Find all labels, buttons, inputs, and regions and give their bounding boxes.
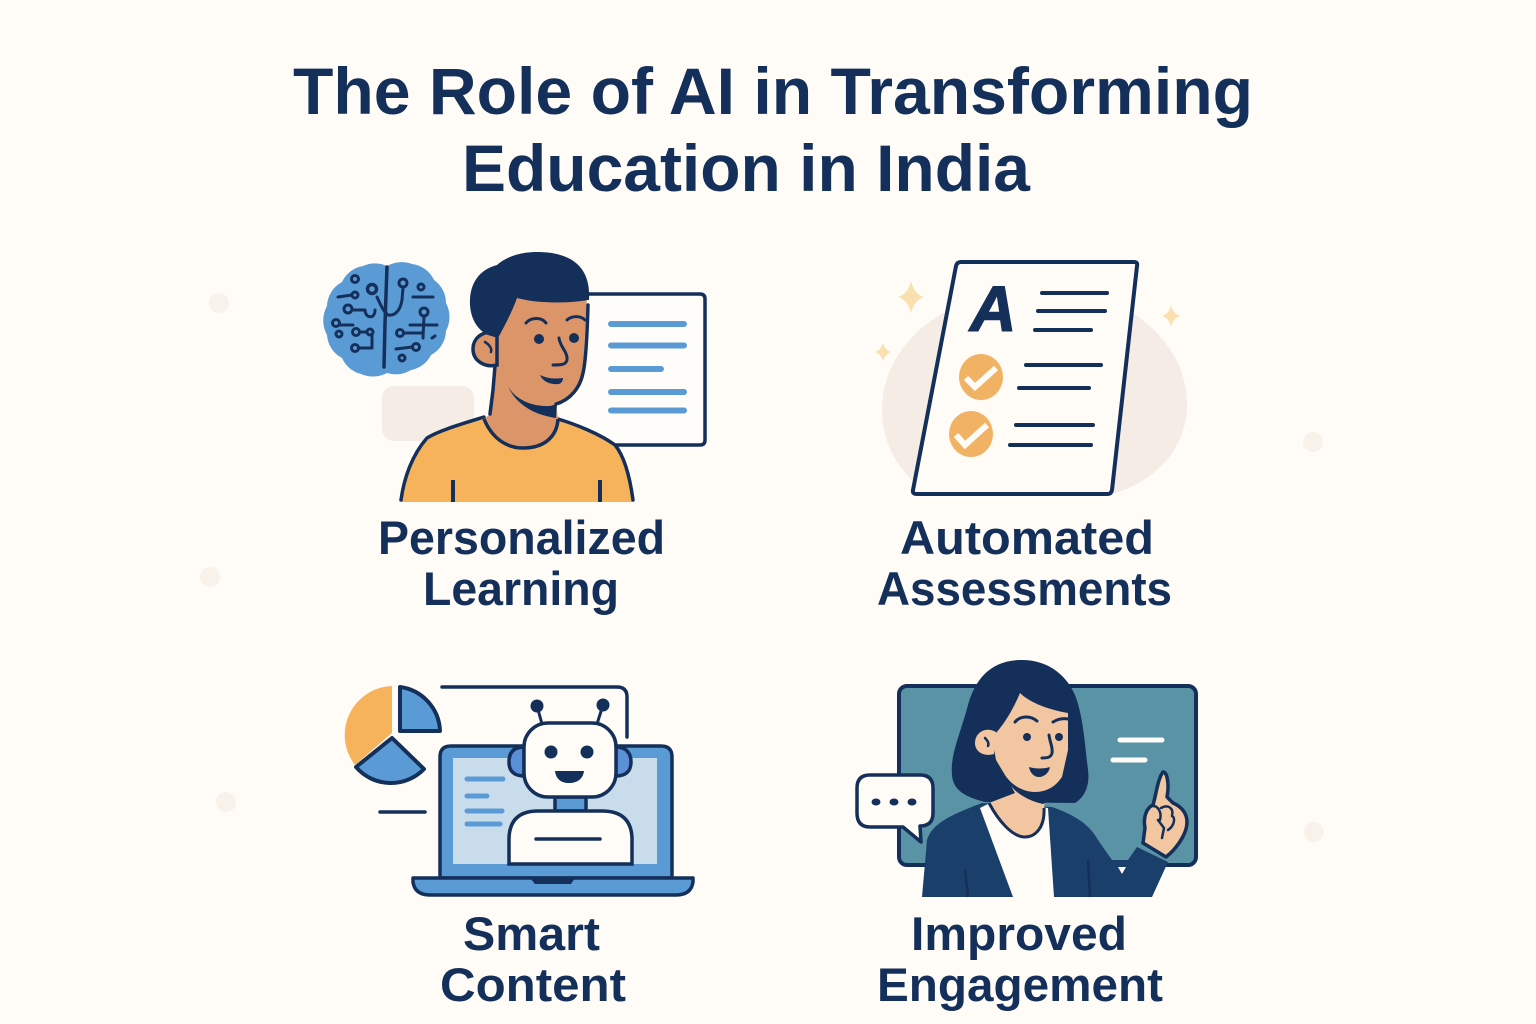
pointing hand [1143,772,1187,857]
neck and face [989,693,1068,837]
answer lines [1010,293,1107,445]
label: automated assessments: Assessments [877,562,1172,615]
title: The Role of AI in Transforming [293,54,1253,128]
beige card [382,386,474,441]
face details [1015,717,1068,758]
paper [913,262,1137,494]
laptop [413,746,693,895]
label: improved engagement: Engagement [877,958,1163,1011]
lesson board [570,294,705,445]
title [293,54,1253,205]
shirt [401,417,633,502]
connector lines [380,687,627,812]
backdrop blob [882,313,1187,494]
label: automated assessments: Automated [900,511,1154,564]
shirt [980,803,1054,897]
ear [975,730,996,755]
robot [509,698,632,864]
hair [952,660,1088,803]
ear [473,332,497,366]
sparkles [875,281,1180,361]
panel: improved engagement [857,660,1196,1011]
label: automated assessments [877,511,1172,615]
icon: teacher at board [857,660,1196,897]
panel: smart content [345,686,693,1011]
face details [526,317,585,365]
icon: circuit brain [323,262,449,376]
jaw shadow [1005,775,1068,804]
check marks [949,354,1003,457]
hair [470,252,589,338]
grade letter: A [968,273,1016,345]
jaw shadow [508,386,557,418]
label: personalized learning: Personalized [378,511,665,564]
neck and head [484,285,587,448]
jacket [922,803,1168,897]
panel: personalized learning [323,252,705,615]
label: personalized learning [378,511,665,615]
label: improved engagement: Improved [911,907,1127,960]
label: smart content [440,907,626,1011]
panel: automated assessments [875,262,1187,615]
label: smart content: Content [440,958,626,1011]
icon: graded test paper [875,262,1187,494]
title: Education in India [462,131,1031,205]
icon: student with AI brain [323,252,705,502]
pie chart [345,686,440,783]
speech bubble [857,775,933,842]
label: personalized learning: Learning [423,562,619,615]
label: smart content: Smart [463,907,600,960]
label: improved engagement [877,907,1163,1011]
chalkboard [899,686,1196,865]
teacher [922,660,1187,897]
student [401,252,633,502]
icon: robot on laptop with chart [345,686,693,895]
